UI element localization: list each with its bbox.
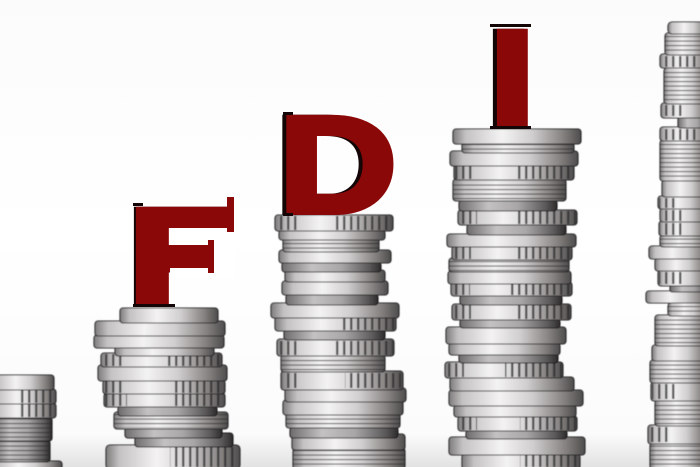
coin stack under I — [445, 129, 585, 467]
letter D: D — [279, 88, 397, 241]
letter D: D — [275, 88, 393, 241]
coin stack under D — [271, 215, 406, 467]
letter F: F — [126, 181, 233, 334]
coin stack under F — [94, 308, 240, 467]
letter I: I — [486, 3, 531, 156]
letter F: F — [128, 181, 235, 334]
letter I: I — [490, 3, 535, 156]
far-right coin stack — [646, 22, 700, 467]
far-left coin stack — [0, 375, 62, 467]
